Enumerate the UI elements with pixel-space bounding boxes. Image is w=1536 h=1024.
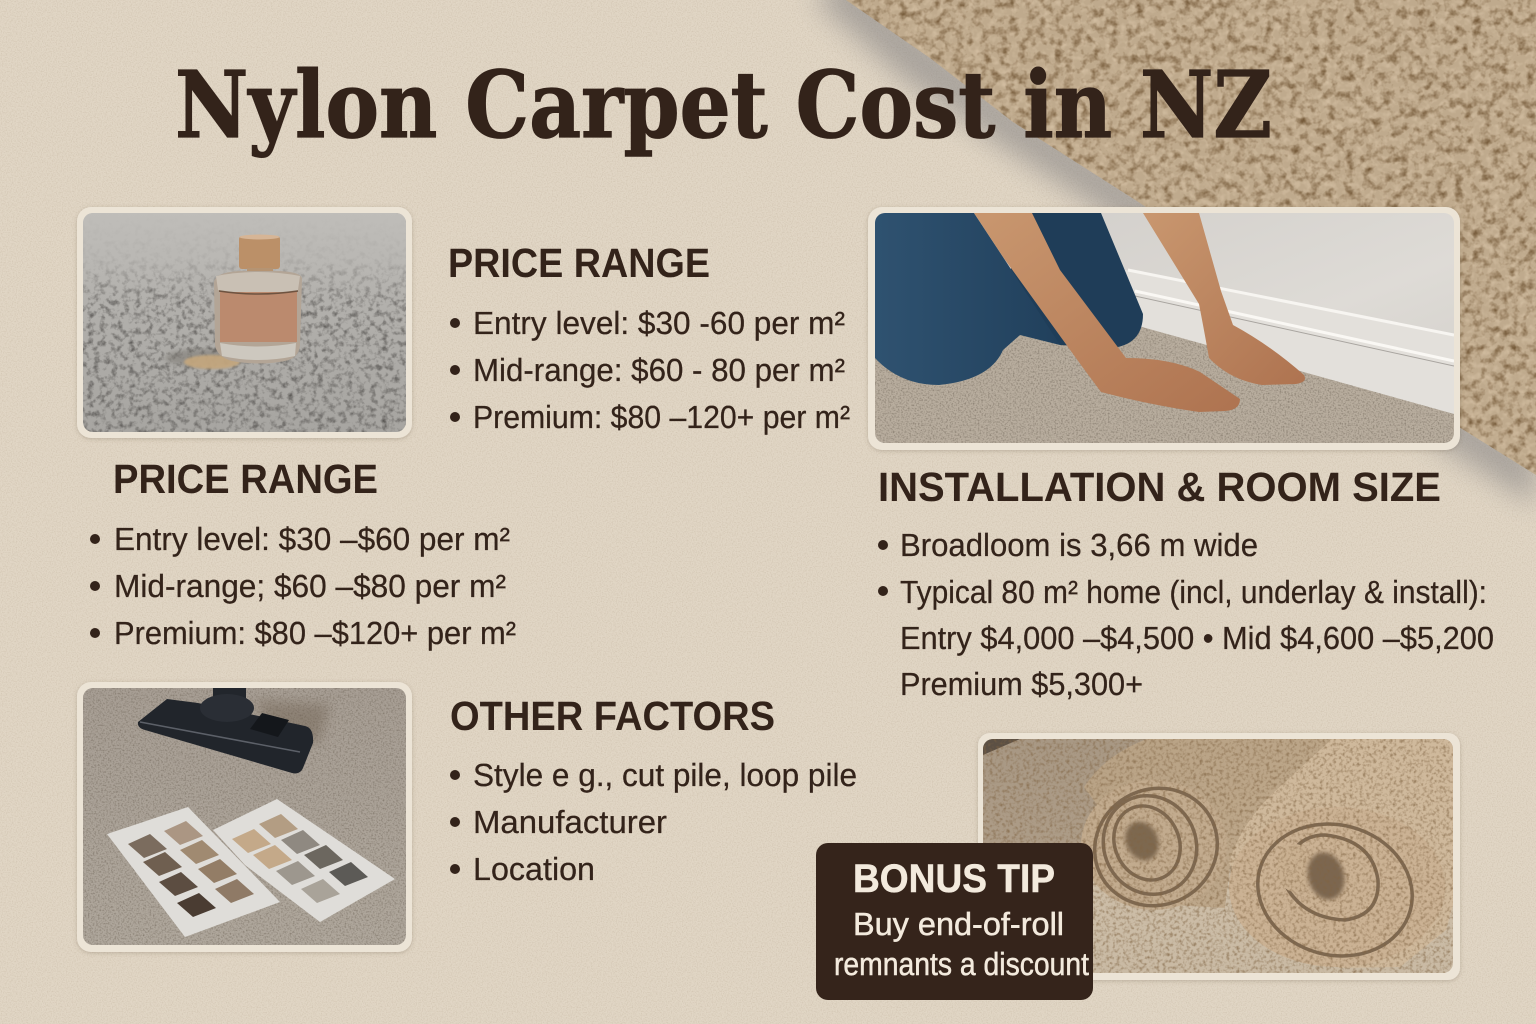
list: price range lower: Mid-range; $60 –$80 per m² <box>114 568 506 604</box>
list: installation details: Broadloom is 3,66 m wide <box>900 527 1258 563</box>
list: other factors <box>450 757 857 887</box>
callout: bonus tip: Buy end-of-roll <box>853 906 1064 942</box>
heading: price range upper: PRICE RANGE <box>448 240 710 286</box>
panel: vacuum and swatches photo <box>77 682 412 952</box>
list: price range upper <box>450 305 850 435</box>
callout: bonus tip: BONUS TIP <box>853 857 1055 901</box>
skirting board <box>1125 270 1454 414</box>
list: price range upper: Mid-range: $60 - 80 per m² <box>473 352 845 388</box>
callout: bonus tip <box>816 843 1093 1000</box>
list: price range lower <box>90 521 516 651</box>
heading: price range lower: PRICE RANGE <box>113 456 378 502</box>
list: price range lower: Premium: $80 –$120+ per m² <box>114 615 516 651</box>
heading: installation and room size: INSTALLATION & ROOM SIZE <box>878 464 1441 510</box>
bottle <box>214 234 302 364</box>
list: price range lower: Entry level: $30 –$60 per m² <box>114 521 510 557</box>
list: installation details: Entry $4,000 –$4,500 • Mid $4,600 –$5,200 <box>900 620 1494 656</box>
heading: other factors: OTHER FACTORS <box>450 693 775 739</box>
list: installation details: Typical 80 m² home (incl, underlay & install): <box>900 574 1487 610</box>
list: other factors: Location <box>473 851 595 887</box>
list: price range upper: Entry level: $30 -60 per m² <box>473 305 845 341</box>
panel: carpet rolls photo <box>978 733 1460 980</box>
list: other factors: Manufacturer <box>473 804 667 840</box>
far arm <box>1143 213 1305 385</box>
list: price range upper: Premium: $80 –120+ per m² <box>473 399 850 435</box>
vacuum head <box>138 688 330 773</box>
list: installation details: Premium $5,300+ <box>900 666 1143 702</box>
title: Nylon Carpet Cost in NZ <box>175 51 1272 159</box>
jeans <box>1000 213 1143 348</box>
near arm <box>974 213 1240 412</box>
panel: perfume bottle on carpet photo <box>77 207 412 438</box>
swatch cards <box>107 799 395 937</box>
list: installation details <box>878 527 1494 702</box>
left roll <box>1081 739 1332 910</box>
right roll <box>1229 739 1453 973</box>
carpet floor <box>875 320 1454 445</box>
carpet corner backdrop <box>815 0 1536 505</box>
callout: bonus tip: remnants a discount <box>834 946 1089 982</box>
list: other factors: Style e g., cut pile, loop pile <box>473 757 857 793</box>
spill stain <box>165 349 245 369</box>
panel: hands smoothing carpet photo <box>868 207 1460 450</box>
